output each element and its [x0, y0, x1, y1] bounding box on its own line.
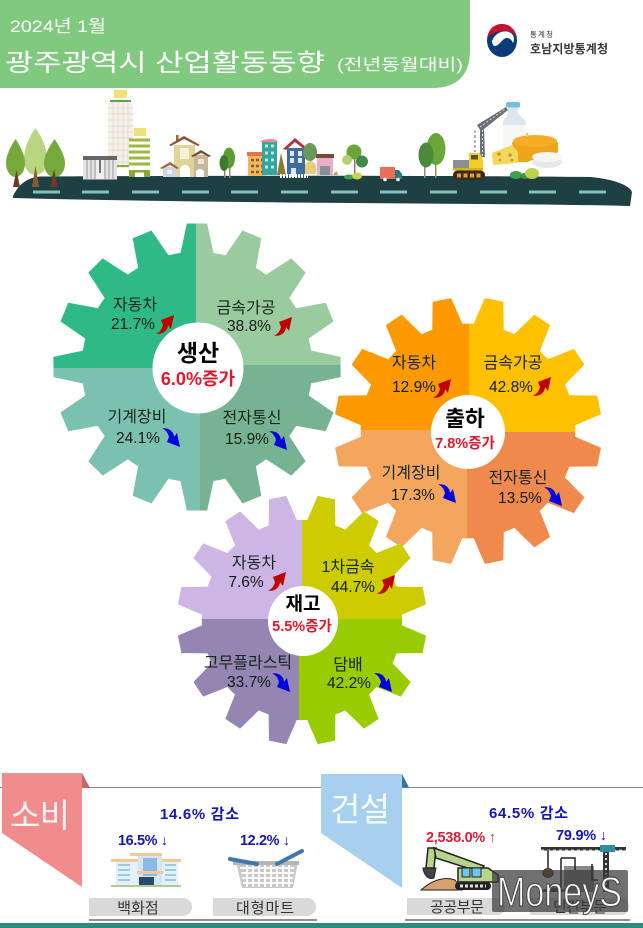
value: 33.7% — [227, 674, 271, 691]
hub value: 6.0%증가 — [161, 369, 236, 389]
pill: department store — [89, 898, 192, 916]
bushes — [510, 168, 539, 179]
pill text: 공공부문 — [430, 899, 484, 916]
icon: excavator — [421, 848, 498, 890]
arrow down — [544, 487, 562, 506]
department store value: 16.5% ↓ — [118, 833, 168, 849]
hub — [431, 395, 505, 469]
segment — [53, 224, 196, 368]
value: 21.7% — [111, 316, 155, 333]
label: electronics: 전자통신 — [489, 469, 547, 487]
label: auto: 자동차 — [392, 354, 436, 372]
icon: department store — [111, 853, 181, 887]
hub — [152, 322, 244, 414]
hub value: 5.5%증가 — [272, 618, 332, 635]
truck — [380, 167, 402, 181]
segment — [335, 298, 469, 430]
pair of trees — [418, 133, 446, 178]
illustration: city road — [6, 90, 632, 206]
arrow up — [433, 379, 451, 398]
small tree — [220, 148, 235, 178]
icon: crane and building — [540, 845, 626, 892]
hub title: 재고 — [286, 593, 320, 615]
gear: production — [53, 223, 341, 511]
tower — [108, 90, 133, 168]
icon: statistics office logo — [487, 24, 517, 57]
label: auto: 자동차 — [232, 554, 276, 572]
total: 14.6% 감소 — [160, 806, 239, 823]
private value: 79.9% ↓ — [556, 828, 607, 844]
title: 광주광역시 산업활동동향 — [5, 49, 325, 77]
hypermarket value: 12.2% ↓ — [240, 833, 290, 849]
arrow down — [438, 484, 456, 503]
pill: hypermarket — [213, 898, 316, 916]
hub value: 7.8%증가 — [435, 435, 495, 452]
value: 17.3% — [391, 487, 435, 504]
value: 12.9% — [392, 379, 436, 396]
road dashes — [33, 190, 606, 194]
crane truck — [453, 107, 508, 180]
cheese — [492, 133, 562, 168]
striped building — [129, 128, 150, 177]
hub title: 생산 — [177, 340, 219, 366]
panel: construction — [321, 774, 643, 920]
value: 24.1% — [116, 430, 160, 447]
round tree — [342, 144, 368, 180]
arrow up — [377, 575, 395, 594]
bottom bar — [0, 923, 643, 928]
segment — [469, 298, 601, 432]
pill text: 민간부문 — [553, 899, 607, 916]
value: 42.2% — [327, 675, 371, 692]
agency name: 호남지방통계청 — [530, 41, 608, 56]
house cluster — [160, 135, 211, 177]
label: electronics: 전자통신 — [223, 409, 281, 427]
panel: consumption — [0, 773, 322, 920]
milk bottle — [503, 102, 526, 148]
arrow up — [156, 315, 174, 334]
ribbon title: 건설 — [330, 791, 390, 828]
ribbon — [2, 773, 82, 887]
arrow down — [269, 431, 287, 450]
ribbon title: 소비 — [10, 797, 70, 834]
pill text: 백화점 — [117, 900, 159, 917]
segment — [467, 432, 601, 564]
label: machinery: 기계장비 — [382, 464, 440, 482]
arrow up — [268, 572, 286, 591]
label: primary metal: 1차금속 — [321, 558, 375, 576]
pill: private — [530, 898, 629, 915]
pill: public — [407, 898, 505, 915]
segment — [335, 430, 467, 564]
segment — [178, 496, 302, 619]
value: 13.5% — [498, 490, 542, 507]
public value: 2,538.0% ↑ — [426, 830, 496, 846]
ribbon — [321, 774, 402, 888]
arrow up — [533, 377, 551, 396]
total: 64.5% 감소 — [489, 805, 568, 822]
label: machinery: 기계장비 — [108, 408, 166, 426]
value: 15.9% — [225, 431, 269, 448]
label: rubber plastics: 고무플라스틱 — [204, 654, 292, 672]
gear: shipment — [335, 298, 601, 564]
agency name: 통계청 — [530, 29, 553, 39]
label: auto: 자동차 — [113, 296, 157, 314]
date heading: 2024년 1월 — [10, 17, 106, 36]
low grey building — [83, 156, 117, 180]
value: 42.8% — [489, 379, 533, 396]
hub — [268, 586, 338, 656]
segment — [302, 496, 426, 619]
colourful houses — [247, 138, 338, 177]
header banner — [0, 0, 470, 88]
segment — [178, 619, 299, 744]
segment — [299, 619, 426, 744]
subtitle: year-on-year: (전년동월대비) — [337, 56, 463, 74]
segment — [196, 224, 341, 365]
gear: inventory — [178, 496, 426, 744]
road — [13, 176, 632, 206]
segment — [53, 368, 200, 510]
hub title: 출하 — [445, 407, 485, 431]
arrow down — [162, 428, 180, 447]
label: metal: 금속가공 — [217, 299, 275, 317]
arrow down — [272, 673, 290, 692]
segment — [200, 365, 341, 510]
arrow down — [374, 673, 392, 692]
icon: shopping basket — [230, 851, 302, 888]
agency name — [530, 29, 608, 56]
arrow up — [274, 317, 292, 336]
value: 7.6% — [228, 574, 264, 591]
pill text: 대형마트 — [236, 900, 294, 917]
value: 38.8% — [227, 318, 271, 335]
label: metal: 금속가공 — [484, 354, 542, 372]
label: tobacco: 담배 — [333, 656, 363, 674]
trees left — [6, 128, 65, 187]
value: 44.7% — [331, 579, 375, 596]
